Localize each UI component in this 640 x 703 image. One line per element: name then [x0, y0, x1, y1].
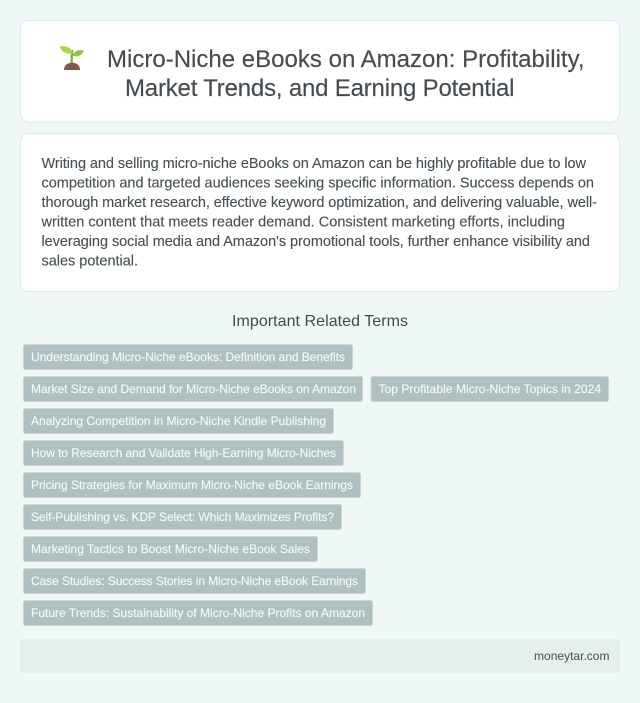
panel: title card: [20, 20, 620, 122]
tag: research: [24, 440, 344, 466]
related term tags: [24, 344, 608, 626]
tag: competition: Analyzing Competition in Micro-Niche Kindle Publishing: [31, 414, 326, 428]
tag: understanding: Understanding Micro-Niche eBooks: Definition and Benefits: [31, 350, 345, 364]
tag: case studies: Case Studies: Success Stories in Micro-Niche eBook Earnings: [31, 574, 358, 588]
icon: seedling: [60, 46, 84, 70]
summary paragraph: written content that meets reader demand. Consistent marketing efforts, including: [40, 214, 565, 230]
title: [107, 46, 584, 102]
summary paragraph: competition and targeted audiences seeking specific information. Success depends on: [42, 176, 594, 192]
tag: top topics: [371, 376, 608, 402]
tag: marketing: [24, 536, 318, 562]
footer: [20, 639, 620, 673]
tag: research: How to Research and Validate High-Earning Micro-Niches: [31, 446, 336, 460]
footer: moneytar.com: [534, 649, 610, 663]
tag: understanding: [24, 344, 352, 370]
summary paragraph: Writing and selling micro-niche eBooks on Amazon can be highly profitable due to low: [42, 156, 587, 172]
summary paragraph: thorough market research, effective keyword optimization, and delivering valuable, well-: [42, 195, 597, 211]
tag: marketing: Marketing Tactics to Boost Micro-Niche eBook Sales: [31, 542, 310, 556]
tag: pricing: Pricing Strategies for Maximum Micro-Niche eBook Earnings: [31, 478, 353, 492]
tag: market size: [24, 376, 362, 402]
summary paragraph: [40, 156, 597, 270]
tag: future trends: [24, 600, 372, 626]
summary paragraph: sales potential.: [42, 254, 138, 270]
title: Market Trends, and Earning Potential: [125, 75, 514, 102]
tag: case studies: [24, 568, 366, 594]
summary paragraph: leveraging social media and Amazon's promotional tools, further enhance visibility and: [42, 234, 590, 250]
tag: self-publishing: Self-Publishing vs. KDP Select: Which Maximizes Profits?: [31, 510, 334, 524]
heading: related terms: Important Related Terms: [232, 313, 408, 330]
tag: market size: Market Size and Demand for Micro-Niche eBooks on Amazon: [31, 382, 356, 396]
tag: pricing: [24, 472, 360, 498]
tag: top topics: Top Profitable Micro-Niche Topics in 2024: [378, 382, 601, 396]
tag: self-publishing: [24, 504, 342, 530]
tag: future trends: Future Trends: Sustainability of Micro-Niche Profits on Amazon: [31, 606, 365, 620]
title: Micro-Niche eBooks on Amazon: Profitability,: [107, 46, 584, 73]
panel: summary: [20, 134, 620, 292]
tag: competition: [24, 408, 334, 434]
